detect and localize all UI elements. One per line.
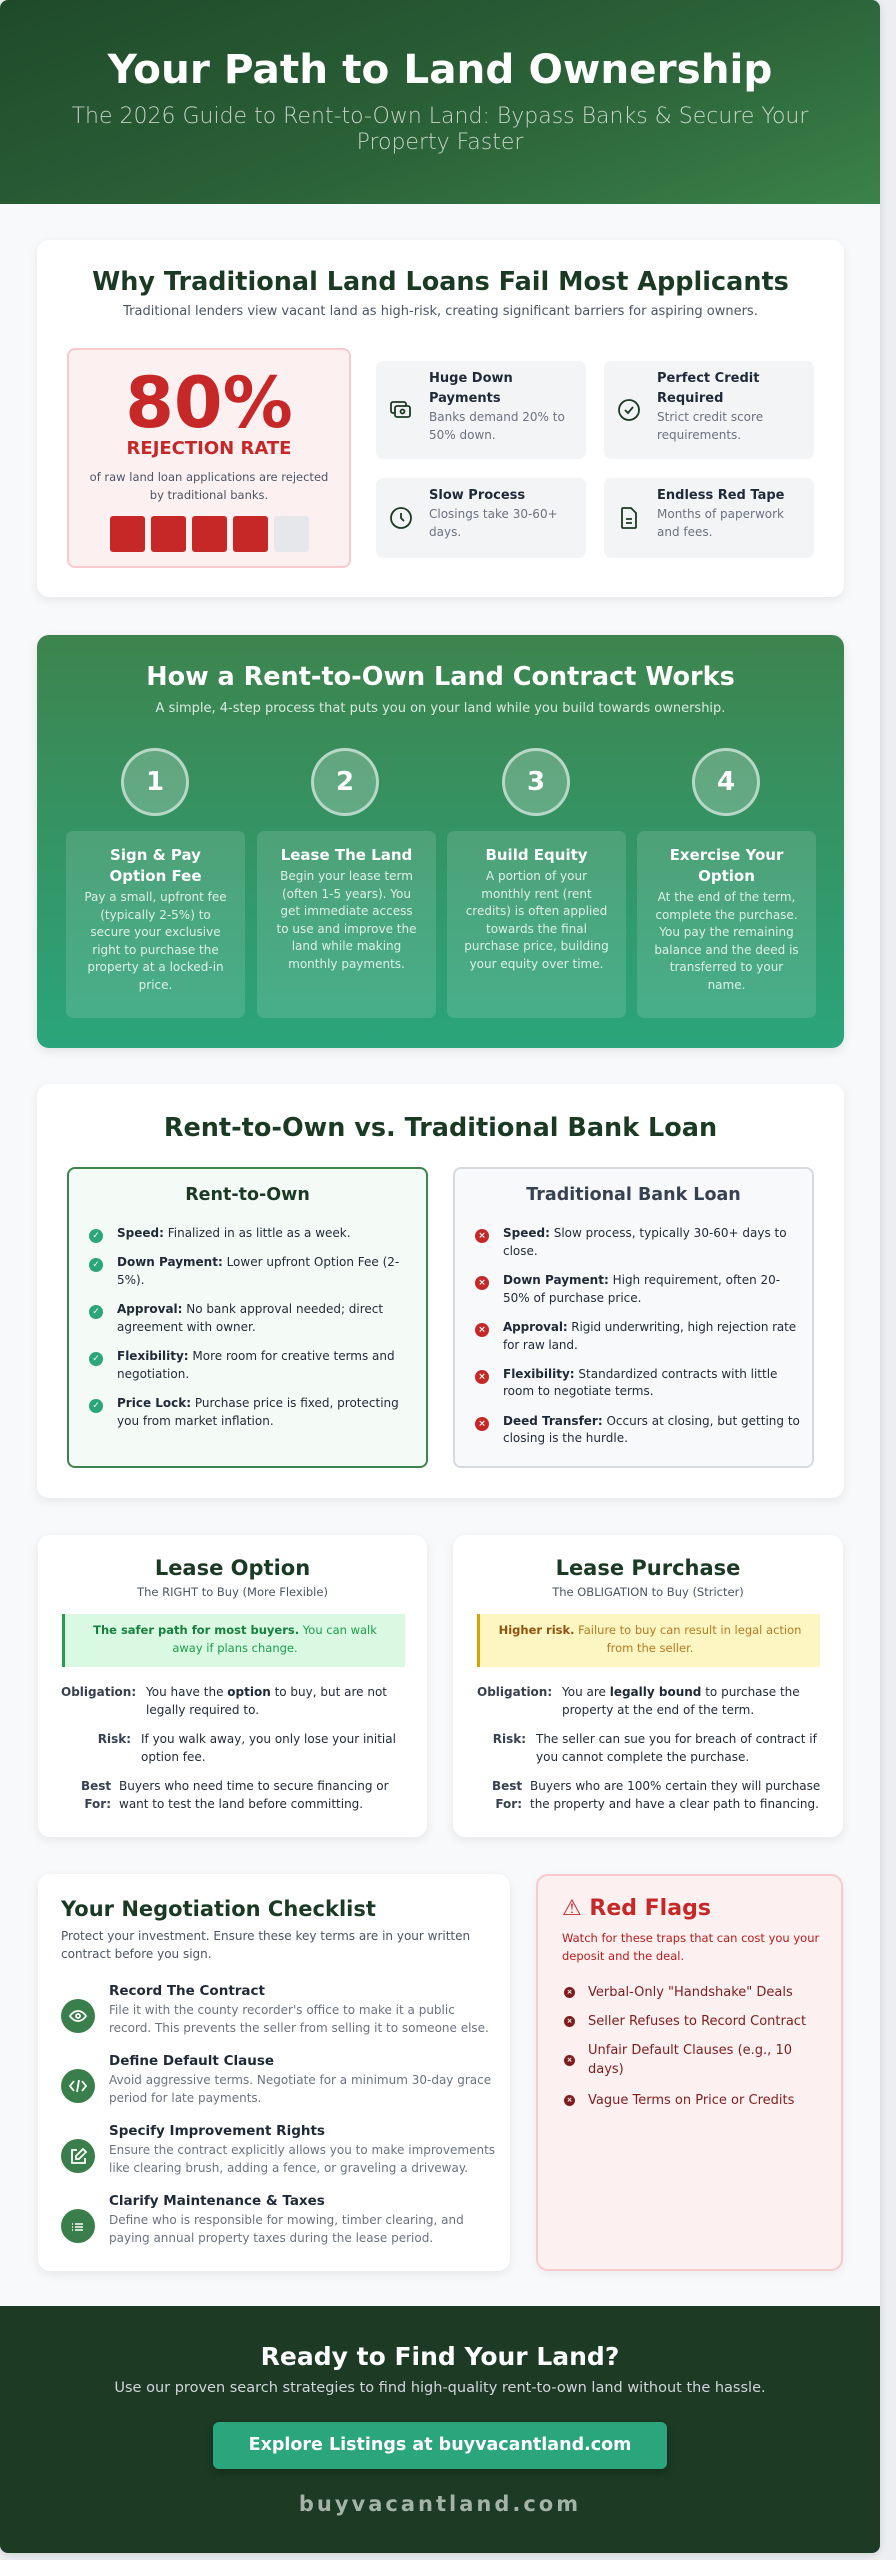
heading: Your Negotiation Checklist bbox=[61, 1897, 376, 1921]
panel: lease option: Risk: bbox=[98, 1732, 131, 1746]
stat number: 80% bbox=[125, 362, 293, 444]
text: Build Equity bbox=[485, 846, 588, 864]
panel: red flags: Unfair Default Clauses (e.g., 10 days) bbox=[588, 2043, 792, 2077]
panel: lease purchase: Risk: bbox=[493, 1732, 526, 1746]
heading: ⚠ Red Flags bbox=[562, 1896, 711, 1921]
step 2 bbox=[311, 748, 379, 816]
item: record: File it with the county recorder's office to make it a public record. This prevents the seller from selling it to someone else. bbox=[109, 2003, 489, 2035]
text: Exercise Your Option bbox=[670, 846, 783, 885]
step 1 bbox=[121, 748, 189, 816]
panel: red flags: × bbox=[567, 2056, 572, 2064]
column: bank loan: Speed: Slow process, typically 30-60+ days to close. bbox=[503, 1226, 787, 1258]
heading: Lease Option bbox=[155, 1556, 310, 1580]
card: credit bbox=[604, 361, 814, 459]
text: Pay a small, upfront fee (typically 2-5%) to secure your exclusive right to purchase the property at a locked-in price. bbox=[84, 890, 227, 992]
column: rent-to-own: ✓ bbox=[92, 1307, 100, 1317]
column: rent-to-own: Flexibility: More room for creative terms and negotiation. bbox=[117, 1349, 395, 1381]
subheading: A simple, 4-step process that puts you on your land while you build towards ownership. bbox=[156, 701, 725, 716]
column: bank loan bbox=[453, 1167, 814, 1468]
item: default clause: Define Default Clause bbox=[109, 2053, 274, 2069]
icon: code bbox=[61, 2069, 95, 2103]
panel: lease option: Obligation: bbox=[61, 1685, 136, 1699]
footer heading: Ready to Find Your Land? bbox=[261, 2342, 619, 2371]
panel: negotiation checklist: Protect your investment. Ensure these key terms are in your written contract before you sign. bbox=[61, 1929, 470, 1961]
heading: Lease Purchase bbox=[556, 1556, 740, 1580]
column: rent-to-own: Rent-to-Own bbox=[185, 1185, 310, 1205]
panel: lease option bbox=[38, 1535, 427, 1837]
card: red tape bbox=[604, 478, 814, 558]
panel: comparison bbox=[37, 1084, 844, 1498]
stat box: 80% bbox=[67, 348, 351, 568]
card: down payments bbox=[376, 361, 586, 459]
step 3 bbox=[502, 748, 570, 816]
step 4: 4 bbox=[717, 767, 735, 797]
flag items: × bbox=[567, 1988, 572, 1996]
column: bank loan: Down Payment: High requirement, often 20-50% of purchase price. bbox=[503, 1273, 780, 1305]
text: At the end of the term, complete the purchase. You pay the remaining balance and the deed is transferred to your name. bbox=[654, 890, 799, 992]
column: rent-to-own: Approval: No bank approval needed; direct agreement with owner. bbox=[117, 1302, 383, 1334]
icon: money bbox=[390, 401, 411, 418]
icon: list bbox=[61, 2209, 95, 2243]
column: bank loan: × bbox=[478, 1372, 486, 1382]
item: record: Record The Contract bbox=[109, 1983, 265, 1999]
icon: check circle bbox=[618, 399, 640, 421]
card: slow process: Closings take 30-60+ days. bbox=[429, 507, 558, 538]
step 3: 3 bbox=[527, 767, 545, 797]
text: A portion of your monthly rent (rent credits) is often applied towards the final purchase price, building your equity over time. bbox=[464, 869, 609, 970]
panel: red flags: Seller Refuses to Record Contract bbox=[588, 2014, 806, 2029]
panel: red flags: Watch for these traps that can cost you your deposit and the deal. bbox=[562, 1931, 819, 1963]
item: maintenance & taxes bbox=[61, 2193, 464, 2245]
item: maintenance & taxes: Clarify Maintenance & Taxes bbox=[109, 2193, 325, 2209]
item: record bbox=[61, 1983, 489, 2035]
brand: buyvacantland.com bbox=[299, 2492, 581, 2516]
column: bank loan: Deed Transfer: Occurs at closing, but getting to closing is the hurdle. bbox=[503, 1414, 800, 1445]
column: bank loan: × bbox=[478, 1325, 486, 1335]
subheading: Traditional lenders view vacant land as high-risk, creating significant barriers for aspiring owners. bbox=[123, 304, 758, 319]
step 4 bbox=[692, 748, 760, 816]
column: rent-to-own: Down Payment: Lower upfront Option Fee (2-5%). bbox=[117, 1255, 399, 1287]
panel: lease purchase: Best For: bbox=[492, 1779, 522, 1811]
panel: lease purchase: Obligation: bbox=[477, 1685, 552, 1699]
panel: red flags: Vague Terms on Price or Credits bbox=[588, 2093, 794, 2108]
card: red tape: Endless Red Tape bbox=[657, 488, 784, 503]
column: rent-to-own: Speed: Finalized in as little as a week. bbox=[117, 1226, 351, 1240]
item: default clause: Avoid aggressive terms. Negotiate for a minimum 30-day grace period for late payments. bbox=[109, 2073, 491, 2105]
heading: how it works: How a Rent-to-Own Land Contract Works bbox=[146, 662, 735, 692]
column: rent-to-own: ✓ bbox=[92, 1401, 100, 1411]
panel: how it works bbox=[37, 635, 844, 1048]
footer CTA bbox=[0, 2306, 880, 2553]
icon: document bbox=[621, 507, 637, 529]
callout: safer bbox=[62, 1614, 405, 1667]
card: credit: Strict credit score requirements. bbox=[657, 410, 763, 442]
panel: negotiation checklist bbox=[38, 1874, 510, 2271]
rows: You are legally bound to purchase the property at the end of the term. bbox=[562, 1685, 800, 1717]
column: bank loan: × bbox=[478, 1419, 486, 1429]
item: maintenance & taxes: Define who is responsible for mowing, timber clearing, and paying annual property taxes during the lease period. bbox=[109, 2213, 464, 2245]
flag items: Verbal-Only "Handshake" Deals bbox=[588, 1985, 793, 2000]
text: Begin your lease term (often 1-5 years). You get immediate access to use and improve the land while making monthly payments. bbox=[277, 869, 416, 970]
card: slow process: Slow Process bbox=[429, 488, 525, 503]
column: rent-to-own: ✓ bbox=[92, 1231, 100, 1241]
column: rent-to-own: ✓ bbox=[92, 1354, 100, 1364]
icon: eye bbox=[61, 1999, 95, 2033]
callout: safer: The safer path for most buyers. You can walk away if plans change. bbox=[93, 1623, 377, 1655]
subtitle: The 2026 Guide to Rent-to-Own Land: Bypass Banks & Secure Your Property Faster bbox=[72, 104, 808, 155]
icon: edit bbox=[61, 2139, 95, 2173]
callout: higher risk: Higher risk. Failure to buy can result in legal action from the seller. bbox=[499, 1623, 801, 1655]
stat label: REJECTION RATE bbox=[127, 438, 291, 459]
panel: lease option: If you walk away, you only lose your initial option fee. bbox=[141, 1732, 396, 1764]
panel: red flags bbox=[536, 1874, 843, 2271]
bar chart bbox=[110, 516, 309, 552]
item: improvement rights: Ensure the contract explicitly allows you to make improvements like clearing brush, adding a fence, or graveling a driveway. bbox=[109, 2143, 495, 2175]
panel: lease purchase bbox=[453, 1535, 843, 1837]
column: rent-to-own bbox=[67, 1167, 428, 1468]
button bbox=[213, 2422, 667, 2469]
footer text: Use our proven search strategies to find high-quality rent-to-own land without the hassle. bbox=[114, 2380, 766, 2396]
column: bank loan: × bbox=[478, 1231, 486, 1241]
step 2: 2 bbox=[336, 767, 354, 797]
card: credit: Perfect Credit Required bbox=[657, 371, 759, 406]
card: down payments: Banks demand 20% to 50% down. bbox=[429, 410, 565, 442]
callout: higher risk bbox=[477, 1614, 820, 1667]
button: Explore Listings at buyvacantland.com bbox=[249, 2435, 631, 2455]
item: default clause bbox=[61, 2053, 491, 2105]
header bbox=[0, 0, 880, 204]
panel: red flags: × bbox=[567, 2017, 572, 2025]
text: Sign & Pay Option Fee bbox=[110, 846, 202, 885]
panel: red flags: × bbox=[567, 2096, 572, 2104]
panel: lease purchase: Buyers who are 100% certain they will purchase the property and have a clear path to financing. bbox=[530, 1779, 820, 1811]
card: down payments: Huge Down Payments bbox=[429, 371, 513, 406]
panel: lease option: Best For: bbox=[81, 1779, 111, 1811]
icon: clock bbox=[390, 507, 412, 529]
title: Your Path to Land Ownership bbox=[108, 45, 772, 93]
card: red tape: Months of paperwork and fees. bbox=[657, 507, 784, 538]
panel: lease option: The RIGHT to Buy (More Flexible) bbox=[137, 1585, 328, 1599]
step 1: 1 bbox=[146, 767, 164, 797]
card: slow process bbox=[376, 478, 586, 558]
column: bank loan: Approval: Rigid underwriting, high rejection rate for raw land. bbox=[503, 1320, 796, 1352]
item: improvement rights bbox=[61, 2123, 495, 2175]
panel: lease option: Buyers who need time to secure financing or want to test the land before committing. bbox=[119, 1779, 389, 1811]
column: bank loan: Flexibility: Standardized contracts with little room to negotiate terms. bbox=[503, 1367, 777, 1398]
heading: Rent-to-Own vs. Traditional Bank Loan bbox=[164, 1113, 717, 1143]
column: bank loan: × bbox=[478, 1278, 486, 1288]
heading: Why Traditional Land Loans Fail Most Applicants bbox=[92, 267, 789, 297]
stat text: of raw land loan applications are rejected by traditional banks. bbox=[90, 470, 328, 502]
column: rent-to-own: Price Lock: Purchase price is fixed, protecting you from market inflation. bbox=[117, 1396, 399, 1428]
column: rent-to-own: ✓ bbox=[92, 1260, 100, 1270]
text: Lease The Land bbox=[281, 846, 412, 864]
item: improvement rights: Specify Improvement Rights bbox=[109, 2123, 325, 2139]
column: bank loan: Traditional Bank Loan bbox=[526, 1185, 741, 1205]
rows: You have the option to buy, but are not legally required to. bbox=[146, 1685, 387, 1717]
panel: lease purchase: The OBLIGATION to Buy (Stricter) bbox=[552, 1585, 744, 1599]
panel: lease purchase: The seller can sue you for breach of contract if you cannot complete the purchase. bbox=[536, 1732, 817, 1764]
panel: why loans fail bbox=[37, 240, 844, 597]
